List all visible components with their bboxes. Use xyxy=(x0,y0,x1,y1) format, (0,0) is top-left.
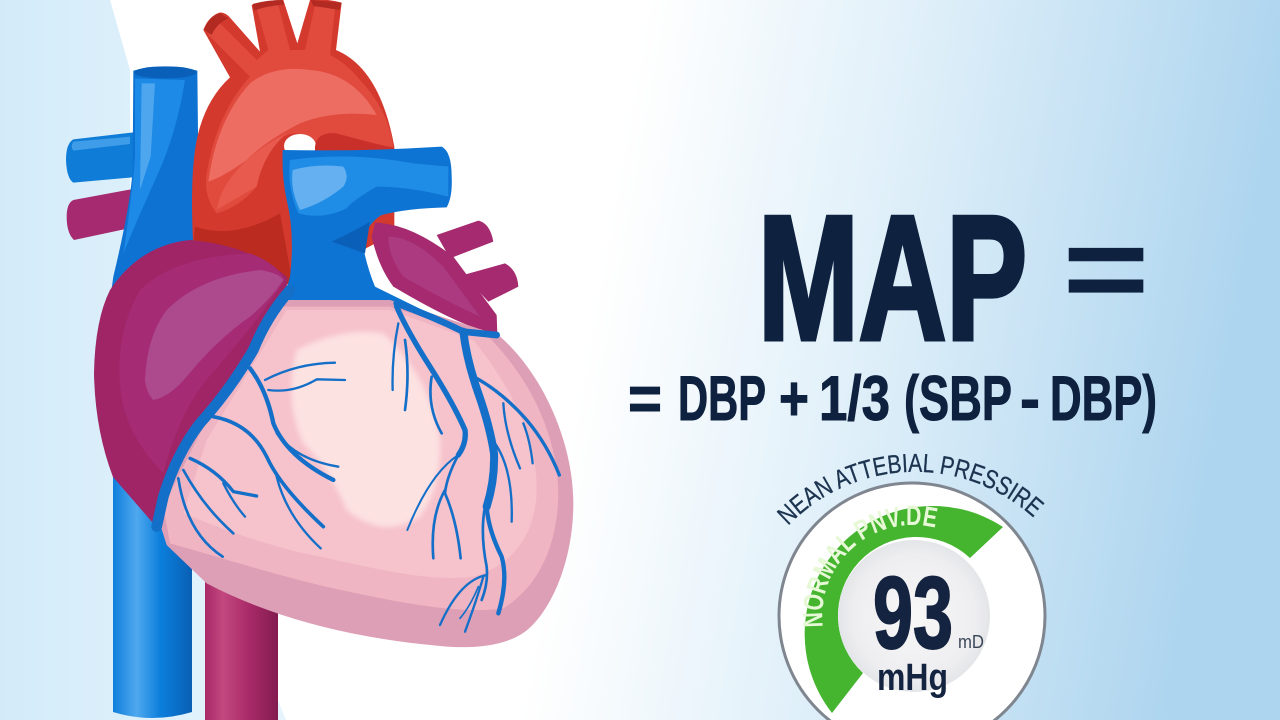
formula heading: MAP = xyxy=(758,179,1149,377)
unit mHg: mHg xyxy=(877,657,948,699)
pulmonary artery xyxy=(273,147,468,360)
MAP: MAP xyxy=(758,179,1027,377)
gauge dial ring xyxy=(779,483,1045,720)
pink ventricle xyxy=(157,300,573,647)
gauge title curved: NEAN ATTEBIAL PRESSIRE xyxy=(776,454,1044,525)
magenta left branch xyxy=(67,188,137,240)
illustration: anatomical heart xyxy=(66,0,573,720)
inferior vena cava xyxy=(113,470,192,718)
formula line: - xyxy=(1020,364,1040,434)
aortic arch opening xyxy=(284,134,316,158)
descending aorta xyxy=(205,570,278,720)
center disc xyxy=(838,540,990,692)
green arc label: NORMAL PNV.DE xyxy=(802,506,938,626)
right atrium xyxy=(94,240,287,523)
coronary vessels xyxy=(157,290,559,632)
value 93: 93 xyxy=(873,556,953,670)
aorta arch xyxy=(192,0,394,287)
normal range green arc xyxy=(805,506,1003,713)
superior vena cava xyxy=(110,67,199,300)
formula line: + xyxy=(779,364,809,434)
formula line: (SBP xyxy=(904,364,1012,434)
gauge: mean arterial pressure 93 mmHg xyxy=(776,454,1046,720)
pulmonary veins xyxy=(437,221,493,258)
upper vessels xyxy=(66,0,518,360)
blue left branch xyxy=(66,132,140,183)
formula line: 1/3 xyxy=(819,364,890,434)
formula line: DBP) xyxy=(1050,364,1157,434)
formula line xyxy=(628,364,1157,434)
equals sign: = xyxy=(1063,203,1149,334)
formula line: = xyxy=(628,364,662,434)
formula line: DBP xyxy=(678,364,766,434)
left atrium xyxy=(372,223,497,334)
small unit: mD xyxy=(958,632,984,652)
heart body: ventricles xyxy=(94,240,573,647)
